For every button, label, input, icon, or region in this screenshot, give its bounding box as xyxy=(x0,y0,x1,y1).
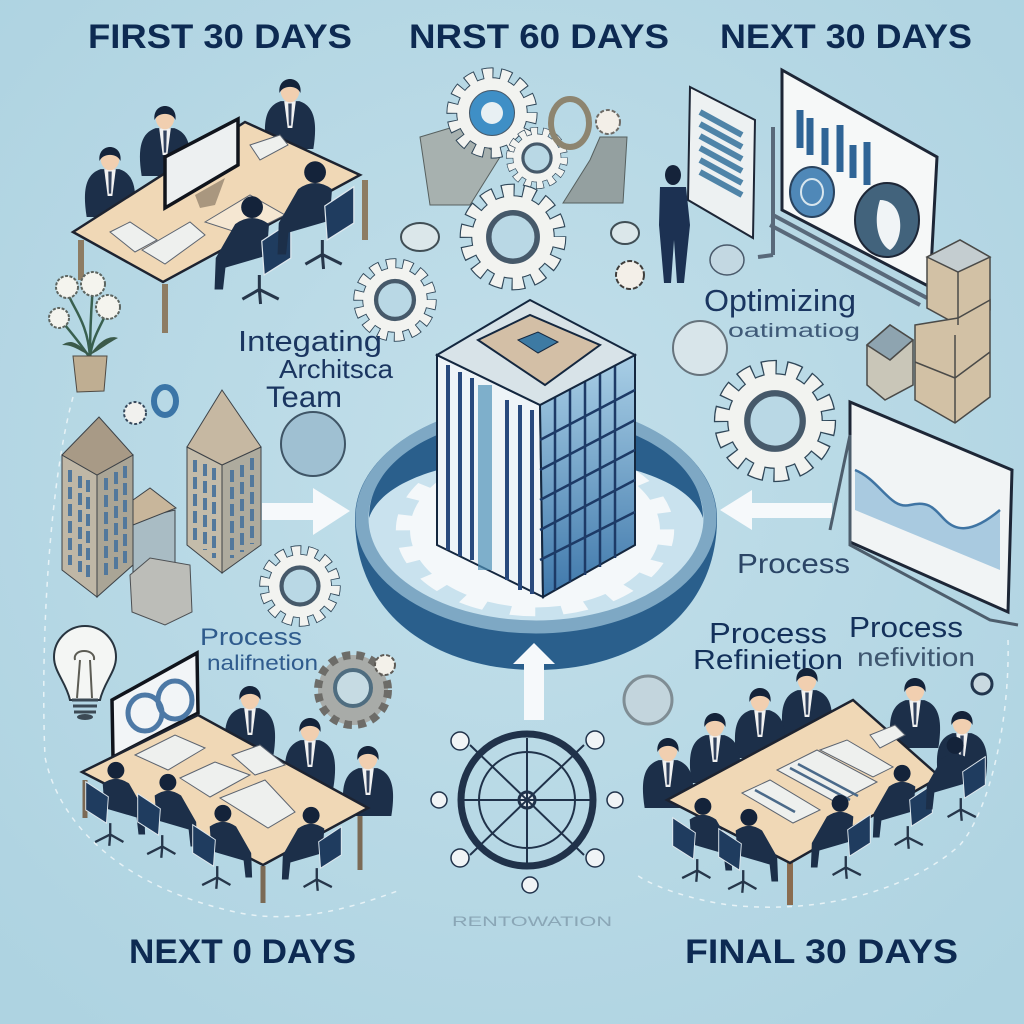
table legs xyxy=(85,780,360,903)
person left xyxy=(85,147,135,217)
gear large xyxy=(468,192,558,282)
flower xyxy=(596,110,620,134)
person top right xyxy=(265,79,315,149)
roof core xyxy=(478,315,600,385)
chart board lower right xyxy=(830,402,1018,625)
building right face xyxy=(540,355,635,597)
chart circle right xyxy=(855,183,919,257)
arrow: from right xyxy=(720,490,832,530)
ring top surface xyxy=(362,409,710,627)
seated person one xyxy=(215,196,291,304)
building left face xyxy=(437,355,543,597)
gear small xyxy=(511,132,563,184)
label: process: Process xyxy=(737,548,850,579)
paper lines xyxy=(755,764,858,812)
arrow: from left xyxy=(262,488,350,535)
label: process nefivition: Process xyxy=(849,612,963,644)
label: process refinition left: Process xyxy=(200,624,302,651)
seated team xyxy=(673,798,732,882)
papers xyxy=(135,735,295,828)
label: integrating architects team: Integating xyxy=(238,326,382,358)
monitor xyxy=(112,653,198,757)
papers xyxy=(742,725,905,823)
presenter xyxy=(659,165,690,283)
monitor xyxy=(165,119,238,208)
heading: first 30 days: FIRST 30 DAYS xyxy=(88,18,352,56)
gear blue xyxy=(453,74,531,152)
gear right xyxy=(723,369,827,473)
rubble sketch xyxy=(420,125,500,205)
ring outer wall xyxy=(355,403,717,670)
icon: droplet badge xyxy=(624,676,672,724)
icon: glass globe xyxy=(281,412,345,476)
scene: final 30 days meeting table xyxy=(643,668,987,905)
label: optimizing xyxy=(704,283,860,342)
label: process refinietion xyxy=(693,618,843,675)
glass blob xyxy=(710,245,744,275)
label: integrating architects team: Architsca xyxy=(279,354,394,384)
roof unit xyxy=(518,332,558,353)
desk top xyxy=(73,122,360,282)
right tower xyxy=(187,390,261,573)
scene: next 0 days meeting table xyxy=(82,653,393,903)
desk legs xyxy=(81,180,365,333)
inner wall xyxy=(369,416,703,518)
label: integrating architects team xyxy=(238,326,394,414)
papers xyxy=(110,135,288,264)
label: process refinition left xyxy=(200,624,318,675)
label: process nefivition xyxy=(849,612,975,672)
table leg xyxy=(787,863,793,905)
scene: first 30 days desk team xyxy=(73,79,365,333)
standing team xyxy=(225,686,275,756)
gear xyxy=(360,265,430,335)
label: process refinietion: Process xyxy=(709,618,827,650)
table top xyxy=(667,700,940,863)
icon: lens xyxy=(673,321,727,375)
icon: potted flowers xyxy=(49,272,120,392)
arrow: from below xyxy=(513,643,555,720)
left tower xyxy=(62,417,133,597)
label: optimizing: oatimatiog xyxy=(728,321,860,342)
icon: small lens xyxy=(972,674,992,694)
bars xyxy=(800,110,867,185)
standing team xyxy=(782,668,832,738)
label: integrating architects team: Team xyxy=(266,381,342,414)
heading: next 0 days: NEXT 0 DAYS xyxy=(129,933,356,971)
seated team xyxy=(86,762,145,846)
label: process refinition left: nalifnetion xyxy=(207,652,318,675)
icon: wheel xyxy=(431,731,623,893)
monitor swirl xyxy=(128,681,192,731)
gear left xyxy=(266,552,334,620)
sketch block xyxy=(563,137,627,203)
icon: light bulb xyxy=(54,626,116,720)
label: faded renovation: RENTOWATION xyxy=(452,913,612,929)
flower xyxy=(616,261,644,289)
dashed flow outline xyxy=(44,397,1008,917)
mid building xyxy=(133,488,176,585)
gear dark xyxy=(318,655,388,725)
monitor stand xyxy=(195,178,225,208)
person top left xyxy=(140,106,190,176)
seated person two xyxy=(278,161,354,269)
icon: twin towers xyxy=(62,390,261,625)
label: process nefivition: nefivition xyxy=(857,642,975,672)
chart board xyxy=(782,70,937,287)
report board xyxy=(688,87,755,238)
heading: next 30 days: NEXT 30 DAYS xyxy=(720,18,972,56)
small circle icon xyxy=(401,223,439,251)
icon: box stack xyxy=(867,240,990,423)
icon: blue ring xyxy=(154,387,176,415)
white gear xyxy=(410,453,660,607)
icon: flower xyxy=(375,655,395,675)
roof outer xyxy=(437,300,635,405)
board stand xyxy=(758,127,927,305)
scene: next 30 days presentation xyxy=(659,70,937,305)
scene: next 60 days gears and sketches xyxy=(360,74,644,335)
chart circle left xyxy=(790,167,834,217)
label: optimizing: Optimizing xyxy=(704,283,856,318)
label: process refinietion: Refinietion xyxy=(693,644,843,675)
small circle icon xyxy=(611,222,639,244)
heading: next 60 days: NRST 60 DAYS xyxy=(409,18,669,56)
table top xyxy=(82,715,368,865)
grey box xyxy=(130,558,192,625)
gear ring xyxy=(551,99,589,147)
icon: small flower xyxy=(124,402,146,424)
heading: final 30 days: FINAL 30 DAYS xyxy=(685,933,958,971)
central ring and building xyxy=(355,300,717,670)
